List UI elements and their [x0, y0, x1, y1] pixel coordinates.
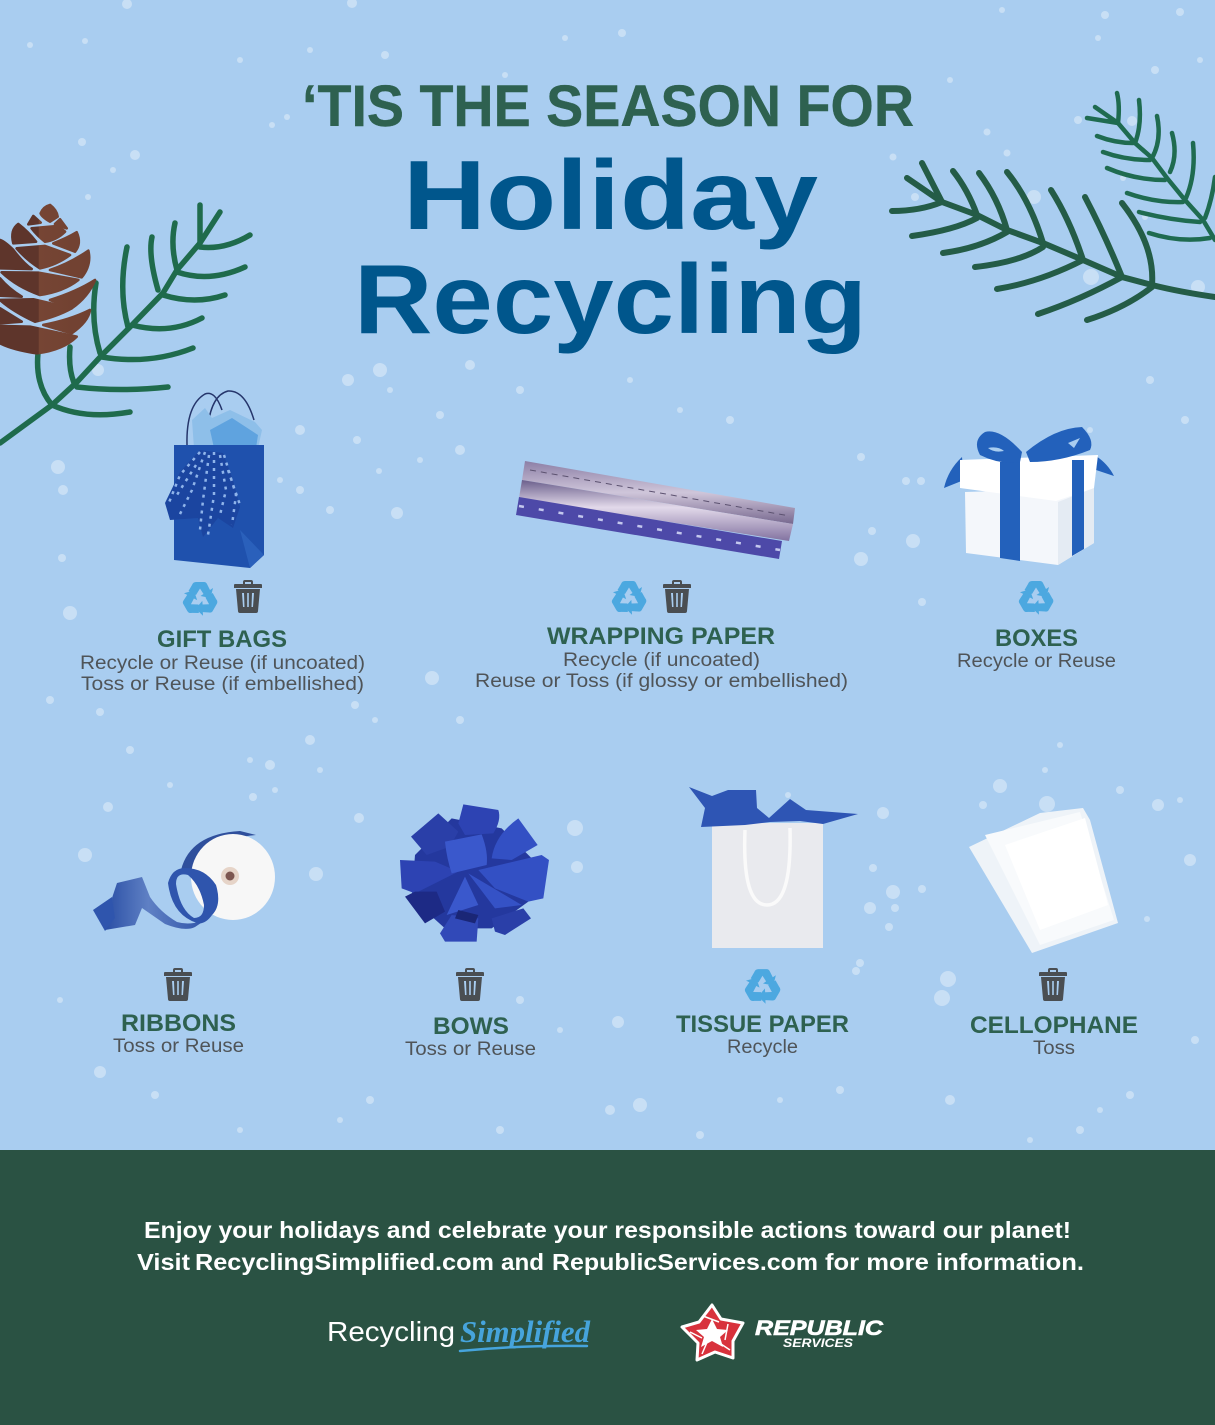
- text: wrapping paper instructions: Recycle (if uncoated): [563, 650, 760, 671]
- text: gift bags instructions: Recycle or Reuse (if uncoated): [80, 653, 365, 674]
- footer message: and: [501, 1249, 544, 1275]
- right pine branch: lower: [892, 163, 1215, 320]
- item: bows: [400, 804, 549, 1060]
- title line: tis the season for: ‘TIS THE SEASON FOR: [302, 74, 914, 139]
- pine cone: [0, 205, 95, 353]
- icon: bow: [400, 804, 549, 942]
- heading: cellophane: CELLOPHANE: [970, 1012, 1138, 1039]
- footer message: RepublicServices.com: [552, 1249, 818, 1275]
- item: wrapping paper: [475, 461, 848, 692]
- footer band: [0, 1150, 1215, 1425]
- logo: republic services: SERVICES: [783, 1336, 853, 1350]
- title line: recycling: Recycling: [354, 244, 867, 354]
- logo: recycling simplified: Simplified: [460, 1314, 590, 1349]
- title: [302, 74, 914, 354]
- text: cellophane instructions: Toss: [1033, 1038, 1075, 1059]
- icon: trash: [1039, 968, 1067, 1001]
- icon: gift box: [944, 427, 1114, 565]
- footer message: RecyclingSimplified.com: [195, 1249, 494, 1275]
- logo: republic services: [682, 1305, 884, 1360]
- icon: recycle: [1015, 581, 1056, 618]
- text: boxes instructions: Recycle or Reuse: [957, 651, 1116, 672]
- title line: holiday: Holiday: [403, 140, 818, 250]
- footer message: for more information.: [825, 1249, 1084, 1275]
- heading: wrapping paper: WRAPPING PAPER: [547, 623, 775, 650]
- logo: recycling simplified: [327, 1314, 590, 1351]
- icon: trash: [663, 580, 691, 613]
- item: boxes: [944, 427, 1116, 672]
- text: ribbons instructions: Toss or Reuse: [113, 1036, 244, 1057]
- footer message: [137, 1217, 1084, 1275]
- left pine branch: [0, 205, 250, 443]
- logo: recycling simplified: Recycling: [327, 1316, 455, 1347]
- icon: cellophane sheets: [969, 808, 1118, 953]
- item: gift bags: [80, 391, 365, 695]
- text: wrapping paper instructions: Reuse or Toss (if glossy or embellished): [475, 671, 848, 692]
- item: cellophane: [969, 808, 1138, 1059]
- icon: white bag with tissue: [689, 787, 858, 948]
- text: wrapping paper instructions: [475, 650, 848, 692]
- heading: boxes: BOXES: [995, 625, 1078, 652]
- heading: bows: BOWS: [433, 1013, 509, 1040]
- footer message: Visit: [137, 1249, 190, 1275]
- text: bows instructions: Toss or Reuse: [405, 1039, 536, 1060]
- icon: gift bag: [165, 391, 264, 568]
- icon: trash: [164, 968, 192, 1001]
- item: ribbons: [93, 831, 275, 1057]
- item: tissue paper: [676, 787, 858, 1058]
- text: gift bags instructions: Toss or Reuse (if embellished): [81, 674, 364, 695]
- footer message: Enjoy your holidays and celebrate your responsible actions toward our planet!: [144, 1217, 1071, 1243]
- icon: trash: [456, 968, 484, 1001]
- icon: recycle: [741, 969, 784, 1007]
- heading: gift bags: GIFT BAGS: [157, 626, 287, 653]
- heading: tissue paper: TISSUE PAPER: [676, 1011, 849, 1038]
- logo: republic services: REPUBLIC: [755, 1317, 884, 1340]
- right pine branch: upper: [1087, 93, 1215, 240]
- text: tissue paper instructions: Recycle: [727, 1037, 798, 1058]
- icon: recycle: [608, 581, 649, 618]
- icon: ribbon spool: [93, 831, 275, 931]
- icon: recycle: [179, 582, 220, 619]
- text: gift bags instructions: [80, 653, 365, 695]
- icon: wrapping paper rolls: [516, 461, 795, 559]
- heading: ribbons: RIBBONS: [121, 1010, 236, 1037]
- icon: trash: [234, 580, 262, 613]
